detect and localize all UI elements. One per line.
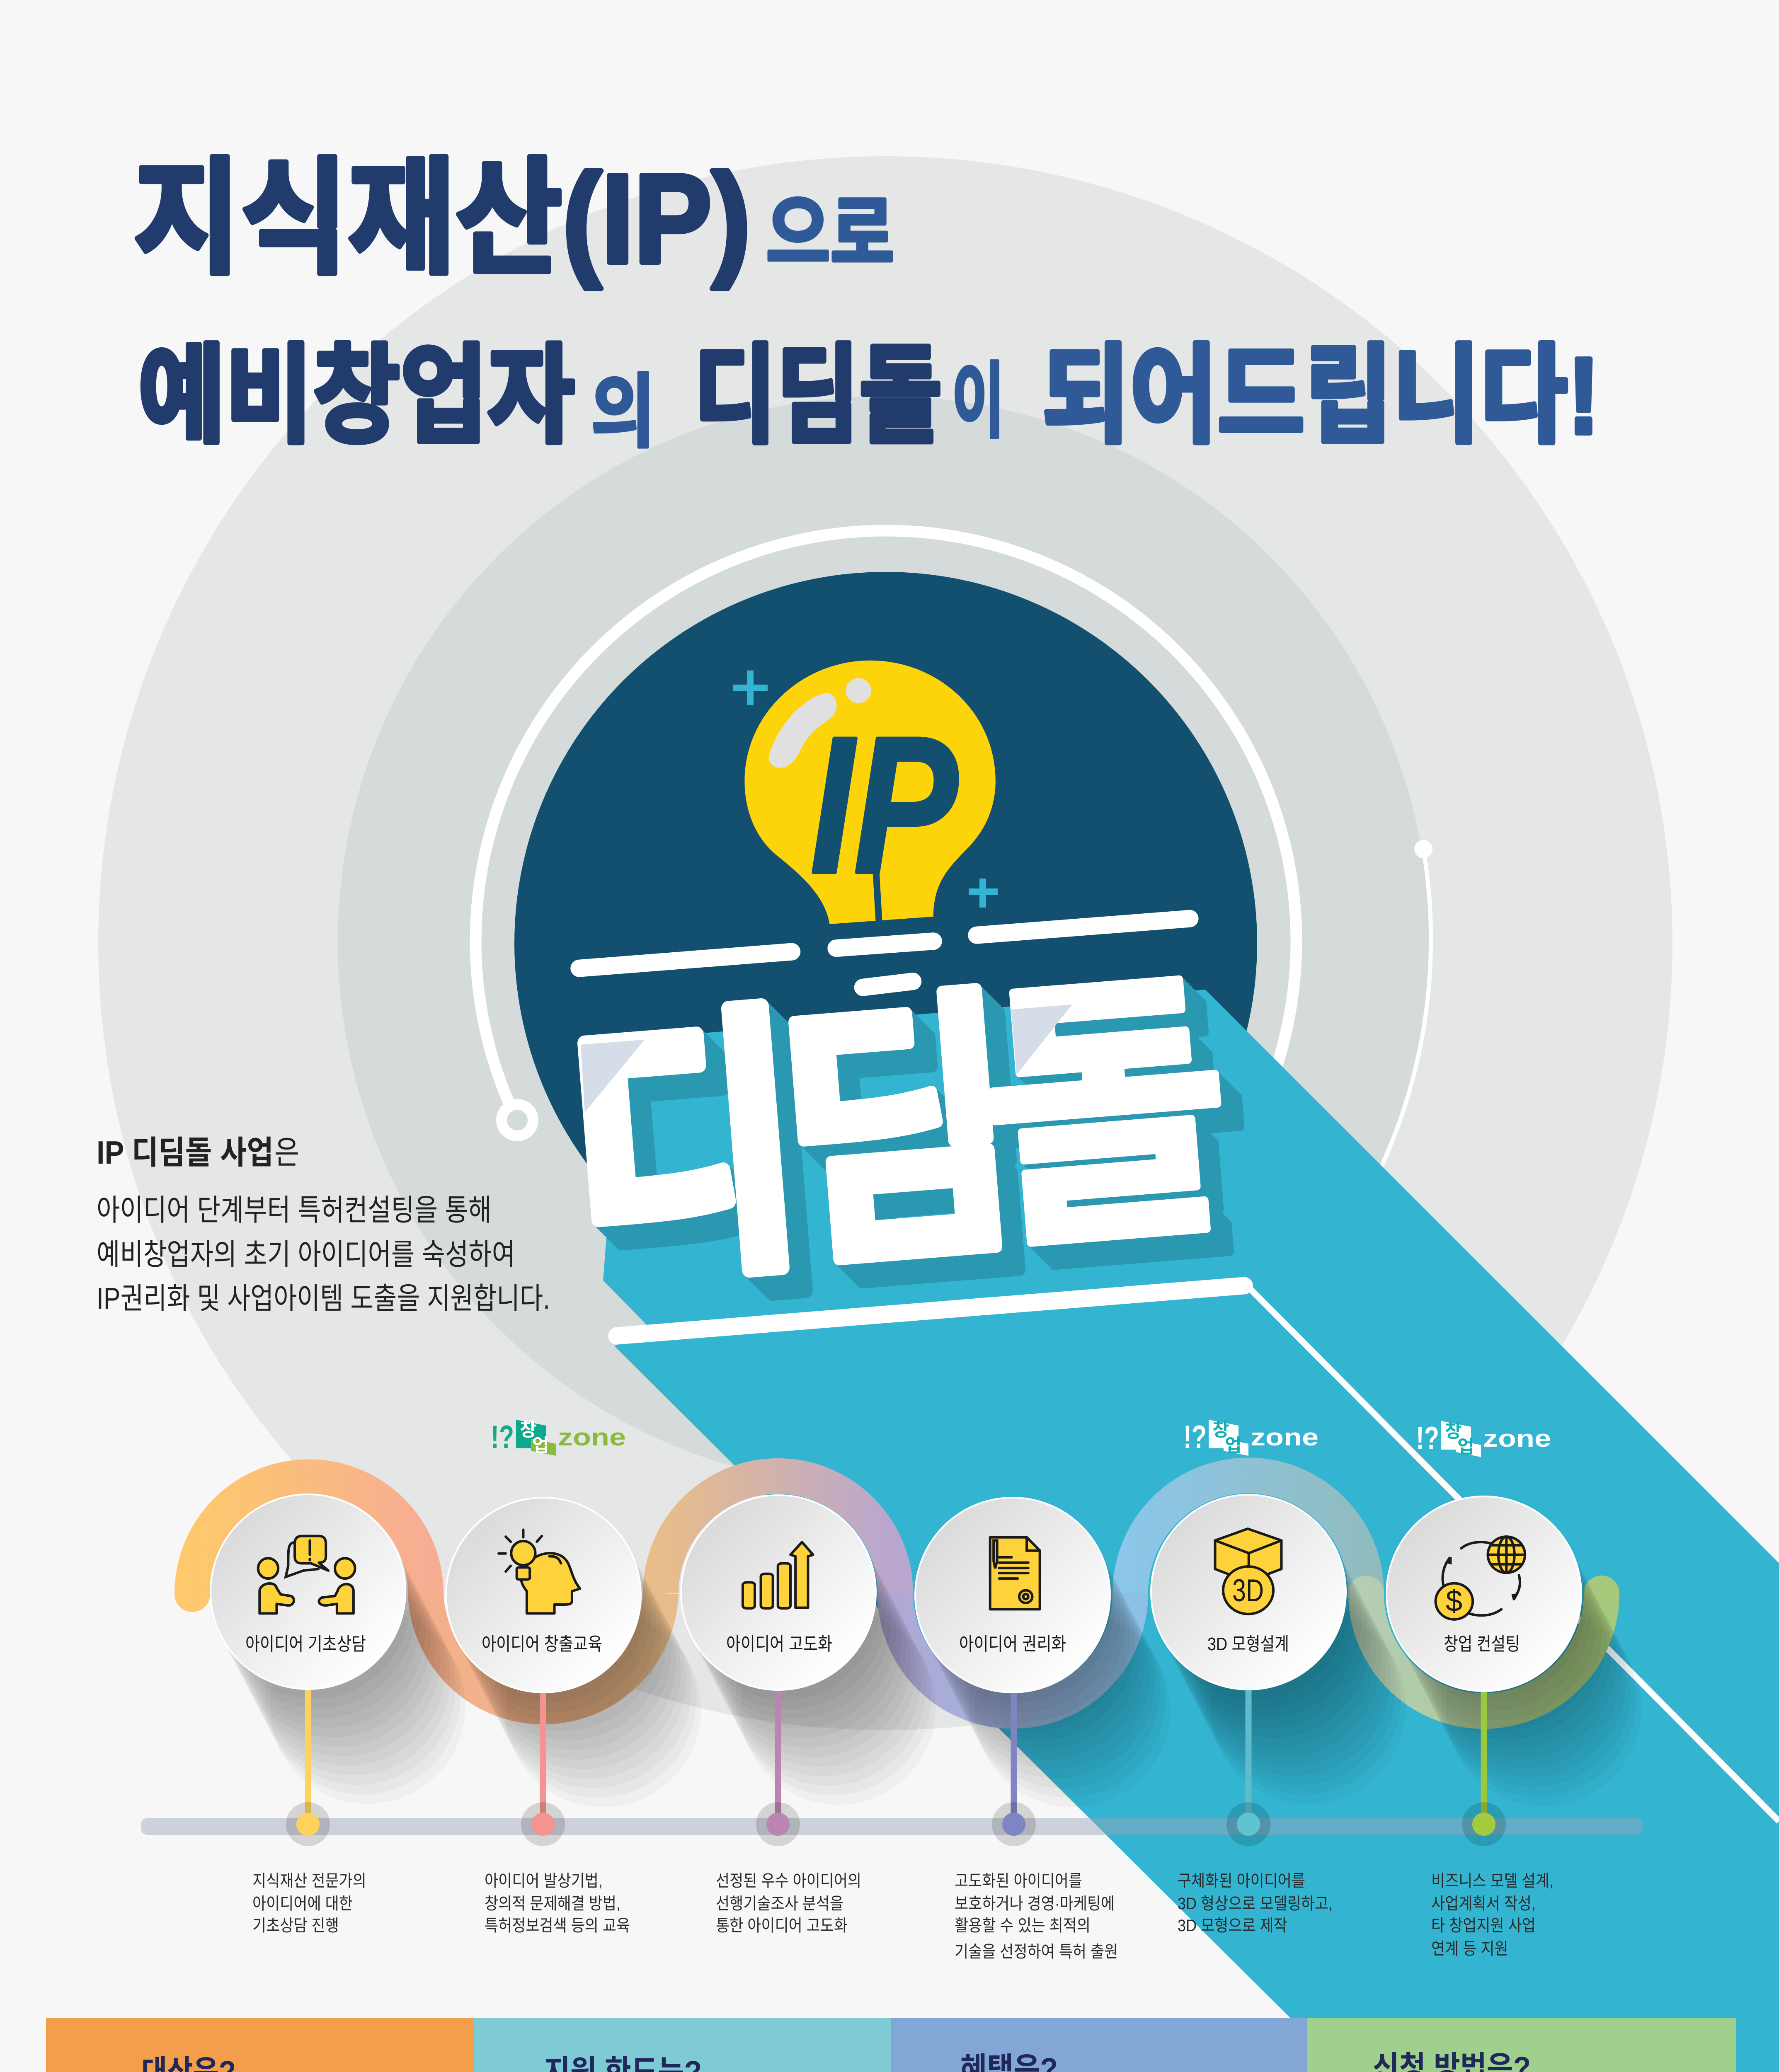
- zone logo 1: !?: [491, 1418, 514, 1455]
- description 5: 3D 모형으로 제작: [1178, 1917, 1287, 1935]
- description 4: [955, 1872, 1118, 1961]
- panel: support limit: [474, 2018, 891, 2072]
- step 2 circle: [446, 1498, 641, 1692]
- description 6: 연계 등 지원: [1431, 1940, 1508, 1958]
- description 6: 타 창업지원 사업: [1431, 1917, 1536, 1935]
- description 1: 지식재산 전문가의: [252, 1872, 366, 1890]
- circle long shadows: [215, 1503, 1641, 1807]
- step 6 circle: $: [1446, 1585, 1462, 1618]
- step 3 label: 아이디어 고도화: [726, 1634, 832, 1654]
- step 6 circle: [1386, 1496, 1581, 1691]
- description 6: [1431, 1872, 1554, 1958]
- description 6: 사업계획서 작성,: [1431, 1895, 1536, 1913]
- medium grey circle: [338, 396, 1430, 1488]
- step 6 label: 창업 컨설팅: [1444, 1634, 1520, 1654]
- step 5 circle: [1151, 1495, 1346, 1690]
- dark navy circle: [514, 572, 1257, 1314]
- white diagonal line: [1247, 1285, 1779, 1821]
- description 5: 구체화된 아이디어를: [1178, 1872, 1305, 1890]
- white open ring with end circle: [476, 531, 1297, 1136]
- intro text block: 아이디어 단계부터 특허컨설팅을 통해: [97, 1194, 492, 1227]
- big title word with long shadow: 돌: [972, 949, 1241, 1283]
- step 1 circle: [211, 1494, 405, 1689]
- thin white arc with dot: [1372, 840, 1432, 1185]
- description 2: [485, 1872, 630, 1935]
- intro text block: 예비창업자의 초기 아이디어를 숙성하여: [97, 1238, 515, 1271]
- description 4: 활용할 수 있는 최적의: [955, 1917, 1091, 1935]
- description 2: 아이디어 발상기법,: [485, 1872, 603, 1890]
- timeline bar: [141, 1818, 1643, 1835]
- zone logo 1: 창: [520, 1420, 536, 1440]
- big title word with long shadow: [557, 949, 1241, 1318]
- zone logo 2: !?: [1183, 1418, 1207, 1455]
- step 6 pin: [1462, 1682, 1506, 1846]
- intro text block: IP 디딤돌 사업: [97, 1134, 274, 1171]
- icon: 3D cube: [1215, 1529, 1281, 1614]
- step 5 label: 3D 모형설계: [1207, 1634, 1289, 1654]
- step 1 label: 아이디어 기초상담: [245, 1634, 366, 1654]
- description 3: 통한 아이디어 고도화: [716, 1917, 848, 1935]
- panel: benefits: [891, 2018, 1307, 2072]
- panel: target: [46, 2018, 474, 2072]
- zone logo 3: [1416, 1420, 1551, 1457]
- title line 2: 의: [591, 367, 655, 457]
- description 6: 비즈니스 모델 설계,: [1431, 1872, 1554, 1890]
- step 5 circle: 3D: [1232, 1573, 1264, 1608]
- icon: head with bulb: [499, 1530, 580, 1613]
- big title word with long shadow: 디: [557, 985, 813, 1318]
- icon: IP light bulb: IP: [810, 696, 958, 914]
- title line 2: [138, 336, 1600, 457]
- description 3: 선행기술조사 분석을: [716, 1895, 843, 1913]
- intro text block: [97, 1134, 550, 1315]
- icon: money and globe cycle: [1435, 1537, 1525, 1619]
- description 2: 특허정보검색 등의 교육: [485, 1917, 630, 1935]
- zone logo 2: [1183, 1418, 1318, 1456]
- step 4 label: 아이디어 권리화: [959, 1634, 1066, 1654]
- step 1 pin: [286, 1682, 330, 1846]
- panel: how to apply: [1307, 2018, 1738, 2072]
- zone logo 2: 창: [1212, 1420, 1229, 1440]
- description 5: 3D 형상으로 모델링하고,: [1178, 1895, 1333, 1913]
- step 3 pin: [756, 1682, 800, 1846]
- zone logo 2: zone: [1251, 1424, 1318, 1451]
- step 5 pin: [1226, 1682, 1270, 1846]
- description 1: 아이디어에 대한: [252, 1895, 353, 1913]
- description 3: 선정된 우수 아이디어의: [716, 1872, 861, 1890]
- description 5: [1178, 1872, 1333, 1935]
- step 3 circle: [681, 1495, 876, 1690]
- blue diagonal band: [603, 990, 1779, 2072]
- icon: growth bars: [743, 1542, 813, 1608]
- step 2 label: 아이디어 창출교육: [482, 1634, 602, 1654]
- title line 2: 예비창업자: [138, 336, 575, 456]
- zone logo 3: 업: [1457, 1437, 1474, 1457]
- intro text block: IP권리화 및 사업아이템 도출을 지원합니다.: [97, 1282, 550, 1315]
- intro text block: 은: [274, 1134, 299, 1171]
- step 4 pin: [992, 1682, 1036, 1846]
- description 1: [252, 1872, 366, 1935]
- icon: IP light bulb: [733, 661, 998, 924]
- description 1: 기초상담 진행: [252, 1917, 339, 1935]
- description 2: 창의적 문제해결 방법,: [485, 1895, 620, 1913]
- zone logo 3: !?: [1416, 1420, 1439, 1456]
- icon: document: [990, 1537, 1040, 1609]
- title line 2: 디딤돌: [693, 336, 942, 456]
- description 4: 고도화된 아이디어를: [955, 1872, 1082, 1890]
- letter highlight facets: [581, 1005, 1072, 1112]
- icon: two people talking: [258, 1536, 355, 1613]
- big title word with long shadow: 딤: [767, 968, 1028, 1301]
- description 4: 보호하거나 경영·마케팅에: [955, 1895, 1115, 1913]
- zone logo 3: zone: [1483, 1425, 1551, 1452]
- zone logo 3: 창: [1445, 1421, 1461, 1441]
- description 3: [716, 1872, 861, 1935]
- title line 2: 되어드립니다!: [1042, 336, 1600, 456]
- step 4 circle: [915, 1498, 1110, 1692]
- zone logo 1: zone: [558, 1424, 626, 1451]
- white dashes under bulb: [579, 919, 1190, 988]
- title line 1: 으로: [766, 189, 894, 279]
- zone logo 1: [491, 1418, 626, 1456]
- description 4: 기술을 선정하여 특허 출원: [955, 1943, 1118, 1961]
- title line 1: 지식재산(IP): [133, 148, 751, 290]
- ribbon: [192, 1475, 1602, 1711]
- title line 2: 이: [952, 356, 1005, 448]
- step 2 pin: [521, 1682, 565, 1846]
- large pale circle: [98, 156, 1672, 1730]
- zone logo 2: 업: [1225, 1435, 1241, 1456]
- white underline: [617, 1285, 1244, 1336]
- zone logo 1: 업: [532, 1435, 549, 1456]
